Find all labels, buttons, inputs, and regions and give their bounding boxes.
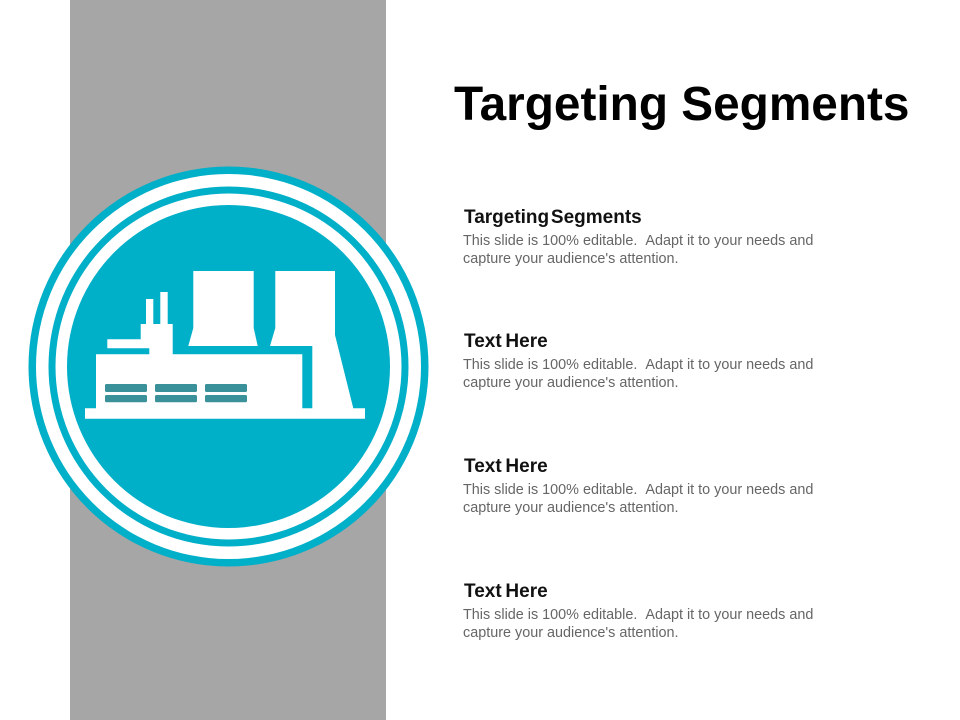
body 1	[463, 233, 813, 267]
body 3	[463, 482, 813, 516]
icon: factory silhouette	[85, 271, 365, 419]
text block 3	[463, 456, 813, 516]
gray vertical band	[70, 0, 386, 720]
heading 4: Text Here	[464, 581, 548, 602]
body 2: capture your audience's attention.	[463, 375, 679, 391]
body 2: This slide is 100% editable. Adapt it to your needs and	[463, 357, 813, 373]
body 3: This slide is 100% editable. Adapt it to your needs and	[463, 482, 813, 498]
title: Targeting Segments	[454, 78, 909, 131]
body 3: capture your audience's attention.	[463, 500, 679, 516]
body 4: This slide is 100% editable. Adapt it to your needs and	[463, 607, 813, 623]
body 1: This slide is 100% editable. Adapt it to your needs and	[463, 233, 813, 249]
text block 2	[463, 331, 813, 391]
heading 3: Text Here	[464, 456, 548, 477]
factory windows	[105, 384, 247, 402]
body 1: capture your audience's attention.	[463, 251, 679, 267]
heading 2: Text Here	[464, 331, 548, 352]
body 2	[463, 357, 813, 391]
text block 1	[463, 207, 813, 267]
body 4: capture your audience's attention.	[463, 625, 679, 641]
body 4	[463, 607, 813, 641]
heading 1: Targeting Segments	[464, 207, 642, 228]
